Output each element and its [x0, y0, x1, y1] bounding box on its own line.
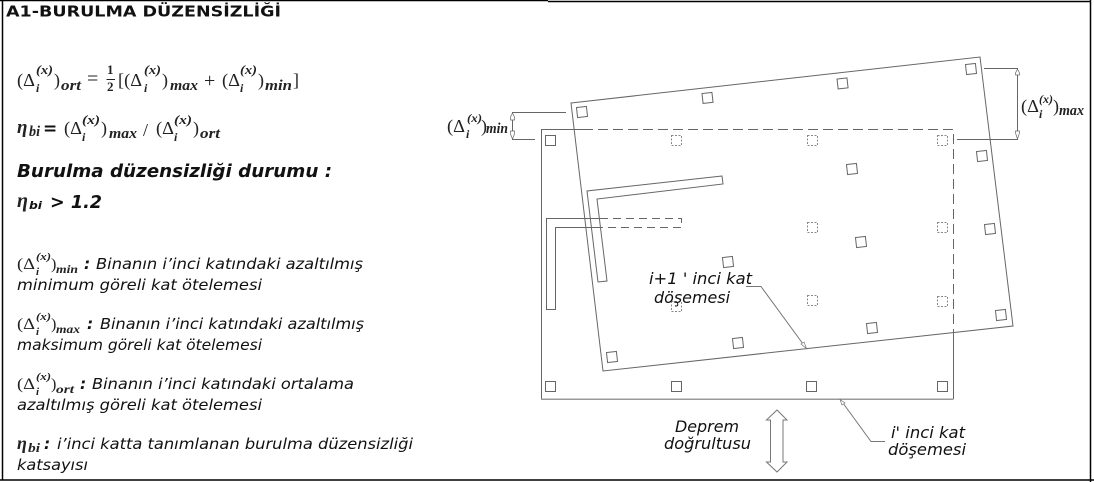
formula: average displacement: [(Δ — [118, 70, 142, 91]
formula: torsional irregularity coefficient: ort — [200, 126, 221, 142]
label: minimum displacement: (x) — [467, 111, 482, 125]
formula: average displacement: + — [204, 70, 215, 92]
leader: upper slab label — [746, 286, 806, 348]
definition: minimum displacement: (x) — [36, 251, 51, 263]
lower floor columns, visible — [546, 136, 948, 392]
arrow: earthquake direction — [766, 410, 787, 472]
definition: coefficient: i’inci katta tanımlanan burulma düzensizliği — [57, 435, 414, 453]
definition: minimum displacement: : — [84, 255, 90, 273]
lower floor L wall — [546, 218, 682, 310]
definition: average displacement: i — [36, 386, 40, 398]
upper floor slab (i+1) — [571, 57, 1013, 371]
formula: average displacement: 1 — [107, 62, 114, 77]
label: minimum displacement: (Δ — [447, 116, 465, 137]
dimension: minimum displacement — [510, 112, 566, 140]
floor plan diagram — [447, 57, 1084, 472]
definition: minimum displacement — [17, 251, 363, 294]
label: minimum displacement: ) — [481, 116, 487, 137]
formula: average displacement: i — [36, 81, 40, 95]
formula: average displacement: i — [144, 81, 148, 95]
label: lower slab: i' inci kat — [891, 423, 966, 442]
definition: maximum displacement: i — [36, 326, 40, 338]
formula: torsional irregularity coefficient: η — [17, 117, 27, 138]
formula: average displacement: (x) — [240, 62, 257, 77]
definition: average displacement — [17, 371, 354, 414]
label: maximum displacement: i — [1039, 107, 1043, 121]
formula: torsional irregularity coefficient: max — [109, 126, 138, 142]
definition: coefficient: bi — [28, 440, 40, 455]
definition: average displacement: ) — [51, 376, 56, 393]
formula: torsional irregularity coefficient: ) — [101, 118, 107, 139]
definition: maximum displacement: maksimum göreli kat ötelemesi — [17, 336, 263, 354]
definition: maximum displacement: (Δ — [17, 316, 35, 333]
formula: average displacement: = — [87, 68, 98, 90]
formula: torsional irregularity coefficient: / — [143, 120, 148, 140]
definition: coefficient: katsayısı — [17, 456, 88, 474]
label: maximum displacement: ) — [1053, 96, 1059, 117]
label: maximum displacement: (Δ — [1021, 96, 1039, 117]
formula: average displacement: (x) — [36, 62, 53, 77]
definition: minimum displacement: Binanın i’inci katındaki azaltılmış — [96, 255, 363, 273]
label: earthquake direction: Deprem — [675, 417, 739, 436]
dimension: maximum displacement — [957, 68, 1020, 140]
formula: average displacement — [17, 62, 299, 95]
condition value: bi — [29, 199, 42, 212]
heading: irregularity condition: Burulma düzensizliği durumu : — [17, 162, 332, 182]
lower floor columns, hidden — [672, 136, 948, 312]
upper floor L wall — [587, 176, 723, 282]
definition: minimum displacement: minimum göreli kat ötelemesi — [17, 276, 263, 294]
definition: maximum displacement: Binanın i’inci katındaki azaltılmış — [100, 315, 364, 333]
formula: average displacement: ) — [258, 70, 264, 91]
label: minimum displacement: i — [466, 127, 470, 141]
formula: torsional irregularity coefficient: (Δ — [64, 118, 82, 139]
formula: torsional irregularity coefficient: bi — [29, 124, 41, 140]
definition: average displacement: (x) — [36, 371, 51, 383]
label: maximum displacement: (x) — [1039, 92, 1053, 106]
formula: average displacement: ) — [54, 70, 60, 91]
definition: maximum displacement — [17, 311, 364, 354]
definition: coefficient — [17, 433, 414, 474]
formula: average displacement: (x) — [144, 62, 161, 77]
definition: coefficient: η — [17, 433, 27, 453]
definition: average displacement: azaltılmış göreli kat ötelemesi — [17, 396, 263, 414]
definition: minimum displacement: i — [36, 266, 40, 278]
definition: maximum displacement: : — [87, 315, 93, 333]
formula: average displacement: (Δ — [17, 70, 35, 91]
label: maximum displacement: max — [1059, 103, 1084, 119]
upper floor columns — [576, 63, 1007, 363]
definition: maximum displacement: max — [56, 322, 80, 336]
formula: average displacement: (Δ — [222, 70, 240, 91]
label: minimum displacement: min — [486, 121, 508, 137]
label: minimum displacement — [447, 111, 508, 141]
formula: average displacement: 2 — [107, 79, 114, 94]
definition: maximum displacement: ) — [51, 316, 56, 333]
formula: torsional irregularity coefficient: i — [174, 130, 178, 144]
condition value: > 1.2 — [50, 193, 102, 213]
formula: torsional irregularity coefficient — [17, 112, 221, 144]
condition value — [17, 190, 102, 213]
label: lower slab second line: döşemesi — [888, 440, 967, 459]
label: earthquake direction second line: doğrultusu — [664, 434, 751, 453]
formula: average displacement: i — [240, 81, 244, 95]
leader: lower slab label — [840, 399, 885, 442]
definition: minimum displacement: (Δ — [17, 256, 35, 273]
definition: minimum displacement: ) — [51, 256, 56, 273]
definition: minimum displacement: min — [56, 262, 78, 276]
formula: average displacement: ] — [293, 70, 299, 90]
definition: average displacement: (Δ — [17, 376, 35, 393]
definition: maximum displacement: (x) — [36, 311, 51, 323]
definition: average displacement: Binanın i’inci katındaki ortalama — [92, 375, 354, 393]
label: upper slab second line: döşemesi — [654, 288, 731, 307]
title: A1-BURULMA DÜZENSİZLİĞİ — [6, 2, 281, 20]
label: upper slab: i+1 ' inci kat — [649, 269, 753, 288]
label: maximum displacement — [1021, 92, 1084, 121]
formula: average displacement: ort — [61, 78, 82, 94]
formula: torsional irregularity coefficient: = — [43, 119, 57, 139]
condition value: η — [17, 190, 28, 212]
definition: coefficient: : — [44, 435, 50, 453]
formula: average displacement: ) — [162, 70, 168, 91]
definition: average displacement: ort — [56, 382, 75, 396]
definition: average displacement: : — [80, 375, 86, 393]
lower floor slab (i) — [541, 130, 954, 399]
formula: average displacement: max — [170, 78, 199, 94]
formula: torsional irregularity coefficient: (x) — [174, 112, 192, 127]
formula: average displacement: min — [265, 78, 292, 94]
formula: torsional irregularity coefficient: (Δ — [156, 118, 174, 139]
formula: torsional irregularity coefficient: i — [82, 130, 86, 144]
formula: torsional irregularity coefficient: (x) — [82, 112, 100, 127]
formula: torsional irregularity coefficient: ) — [193, 118, 199, 139]
